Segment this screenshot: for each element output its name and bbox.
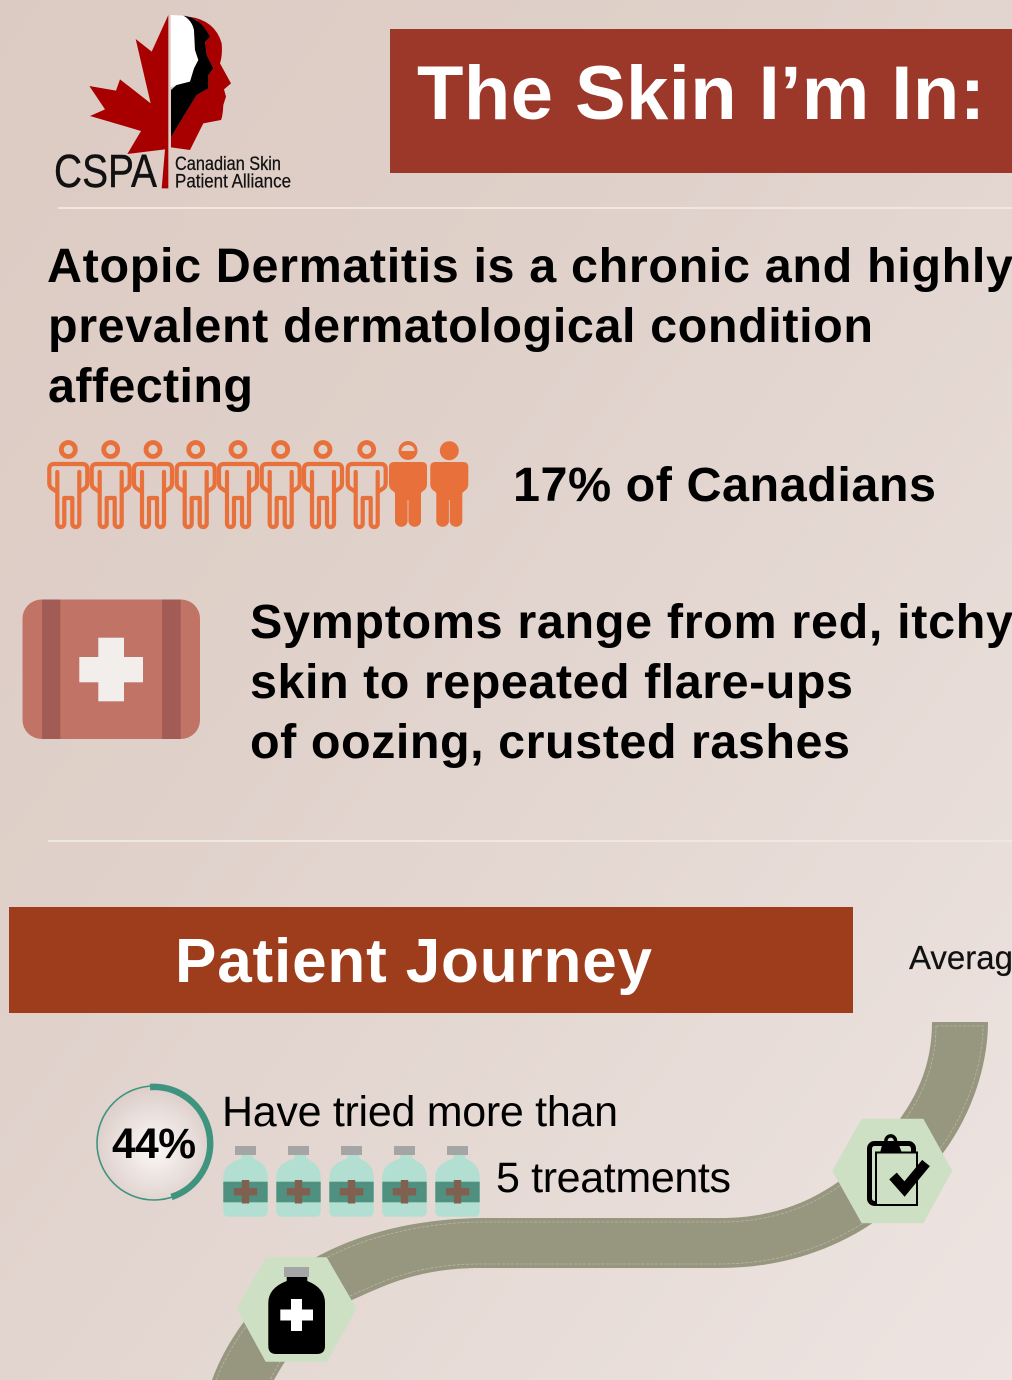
title banner: The Skin I’m In: (417, 51, 985, 136)
logo: CSPA (54, 15, 291, 197)
intro text (47, 239, 1012, 413)
statistic: 17% of Canadians: 17% of Canadians (513, 458, 936, 512)
symptoms text: of oozing, crusted rashes (250, 715, 850, 769)
symptoms text: skin to repeated flare-ups (250, 655, 853, 709)
logo: CSPA: Canadian Skin (175, 154, 281, 175)
icon: clipboard hexagon (832, 1119, 952, 1223)
intro text: affecting (48, 359, 253, 413)
icons: five treatment bottles (223, 1146, 480, 1217)
intro text: prevalent dermatological condition (48, 299, 873, 353)
journey road (212, 1022, 988, 1380)
pictogram: 17 percent of people (49, 441, 468, 527)
intro text: Atopic Dermatitis is a chronic and highly (47, 239, 1012, 293)
symptoms text: Symptoms range from red, itchy (250, 595, 1012, 649)
logo: CSPA: Patient Alliance (175, 172, 291, 192)
logo: CSPA: CSPA (54, 145, 157, 197)
symptoms text (250, 595, 1012, 769)
icon: medicine bottle hexagon (237, 1257, 357, 1362)
patient journey banner: Patient Journey (175, 927, 653, 996)
text: have tried more than: Have tried more than (222, 1088, 618, 1136)
stat: 44 percent ring (97, 1086, 211, 1200)
patient journey banner (9, 907, 853, 1013)
text: 5 treatments: 5 treatments (496, 1154, 731, 1202)
stat: 44 percent ring: 44% (112, 1121, 196, 1168)
icon: first aid kit (22, 600, 200, 739)
title banner (390, 29, 1012, 173)
